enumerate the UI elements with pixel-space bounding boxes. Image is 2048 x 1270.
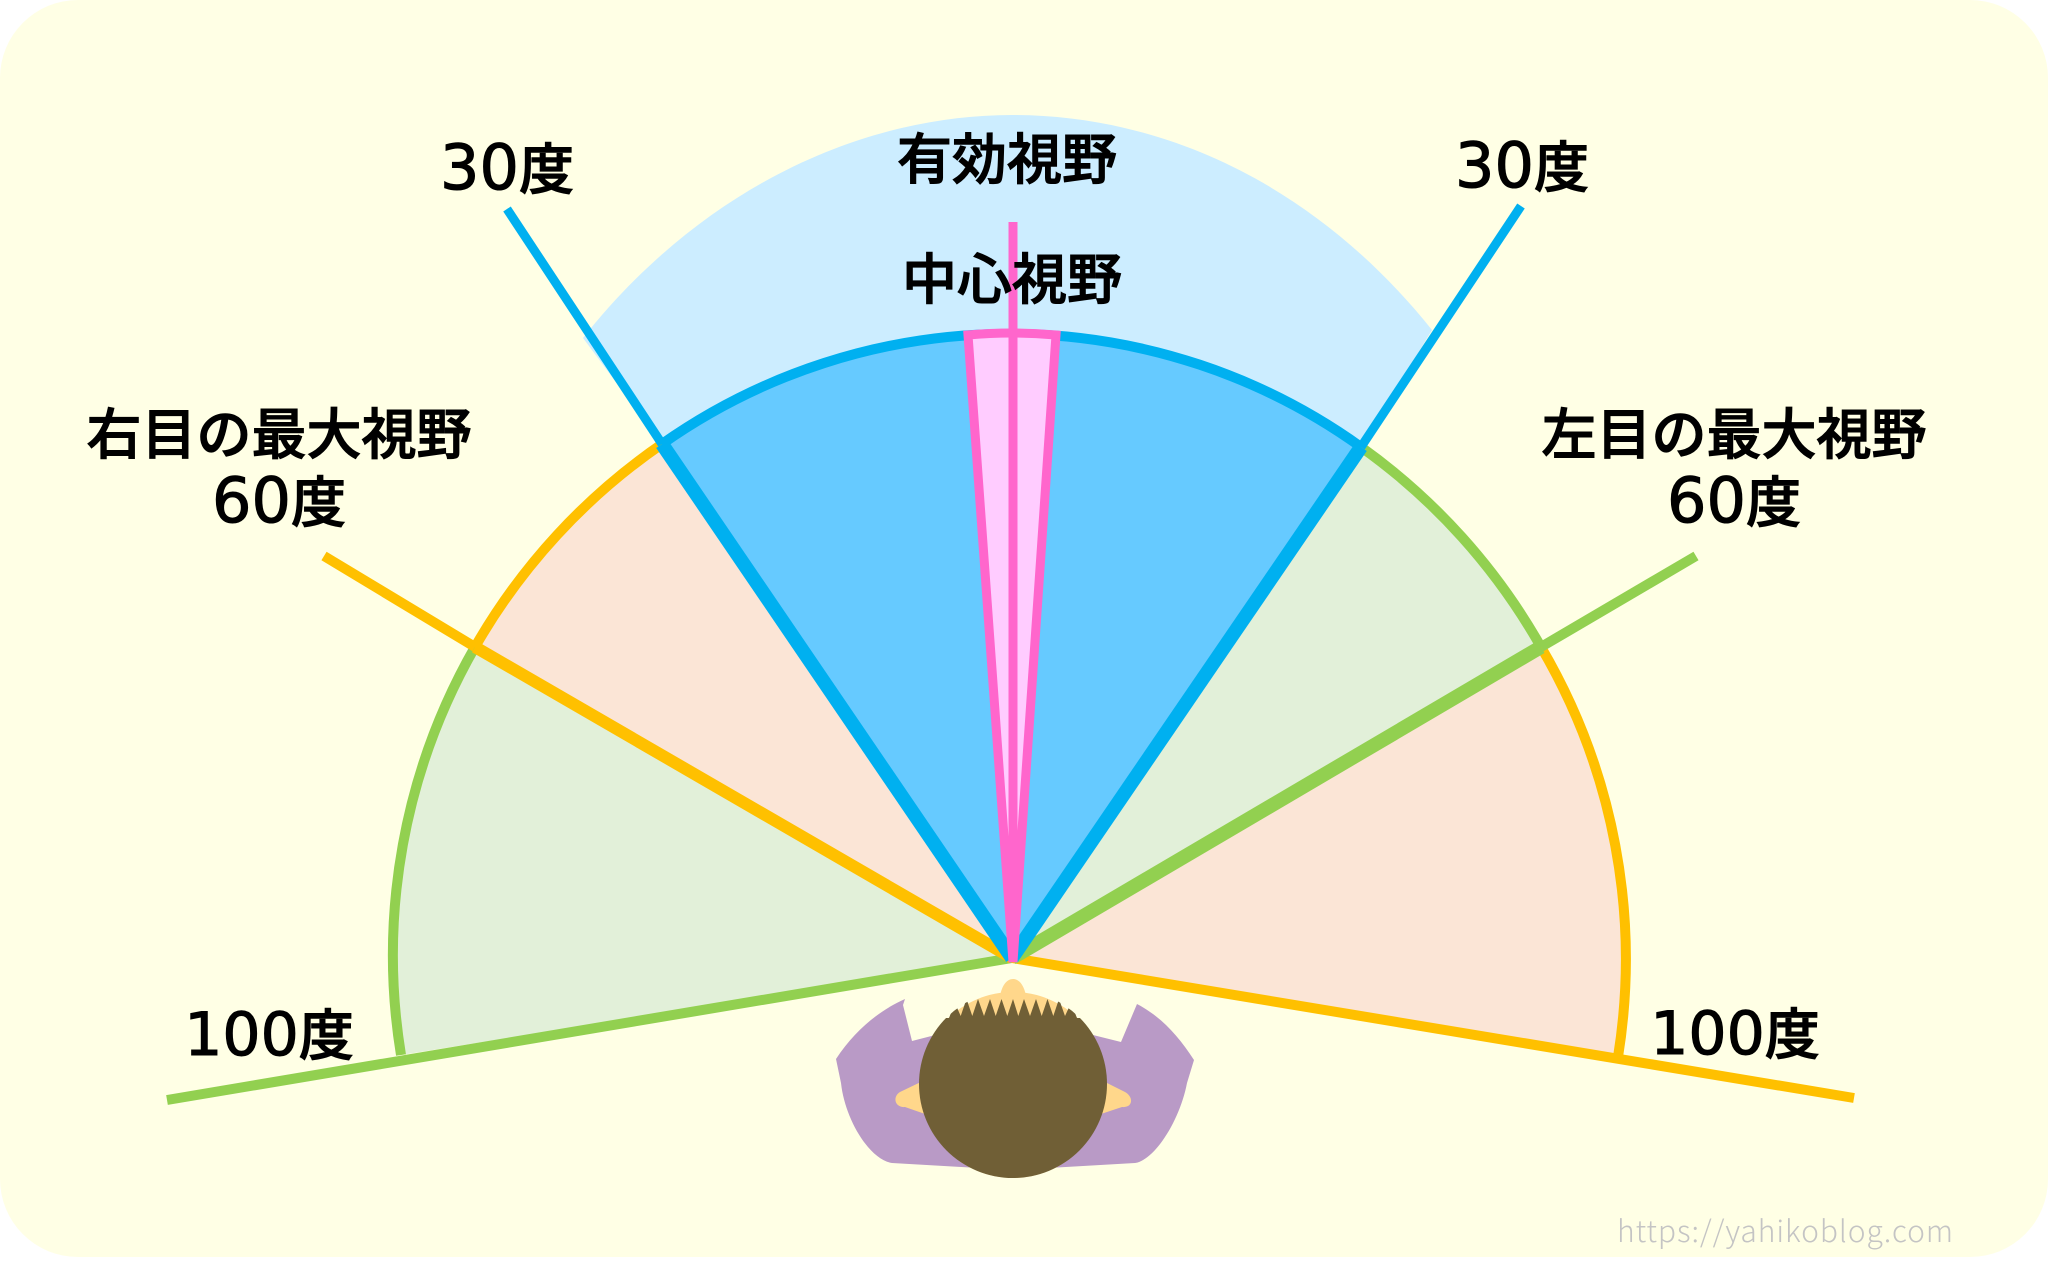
watermark: https://yahikoblog.com xyxy=(1617,1207,1953,1251)
label: 30 degrees left: 30度 xyxy=(440,125,574,205)
sector: right eye max field, right side xyxy=(1012,647,1626,1057)
sector: left eye max field, left side xyxy=(393,647,1012,1055)
face xyxy=(920,992,1106,1178)
line: 100 degrees right xyxy=(1012,958,1854,1098)
label: left eye max field xyxy=(1541,390,1927,538)
ears xyxy=(895,1080,1131,1114)
body right xyxy=(1013,1004,1194,1170)
line: 100 degrees left xyxy=(167,958,1012,1100)
line: 30 degrees right xyxy=(1012,206,1521,958)
nose xyxy=(1000,979,1026,996)
body xyxy=(836,999,1013,1170)
label: effective field: 有効視野 xyxy=(897,115,1117,195)
line: 60 degrees left xyxy=(324,556,1012,958)
label: left eye max field: 左目の最大視野 xyxy=(1541,390,1927,470)
line: 30 degrees left xyxy=(507,209,1012,958)
sector: left eye max field, right side xyxy=(1012,447,1541,958)
label: 100 degrees left: 100度 xyxy=(184,991,354,1071)
label: 100 degrees right: 100度 xyxy=(1650,990,1820,1070)
sector: effective field inner xyxy=(662,334,1361,958)
sector: right eye max field, left side xyxy=(475,444,1012,958)
label: left eye max field: 60度 xyxy=(1667,458,1801,538)
effective vision dome xyxy=(583,115,1432,447)
label: 30 degrees right: 30度 xyxy=(1455,123,1589,203)
label: right eye max field: 右目の最大視野 xyxy=(86,390,472,470)
line: 60 degrees right xyxy=(1012,556,1696,958)
person seen from above xyxy=(836,979,1194,1190)
central vision wedge xyxy=(968,333,1056,962)
central vision center line xyxy=(1008,222,1018,962)
hair xyxy=(919,999,1107,1178)
label: right eye max field: 60度 xyxy=(212,458,346,538)
label: central field: 中心視野 xyxy=(902,235,1122,315)
label: right eye max field xyxy=(86,390,472,538)
